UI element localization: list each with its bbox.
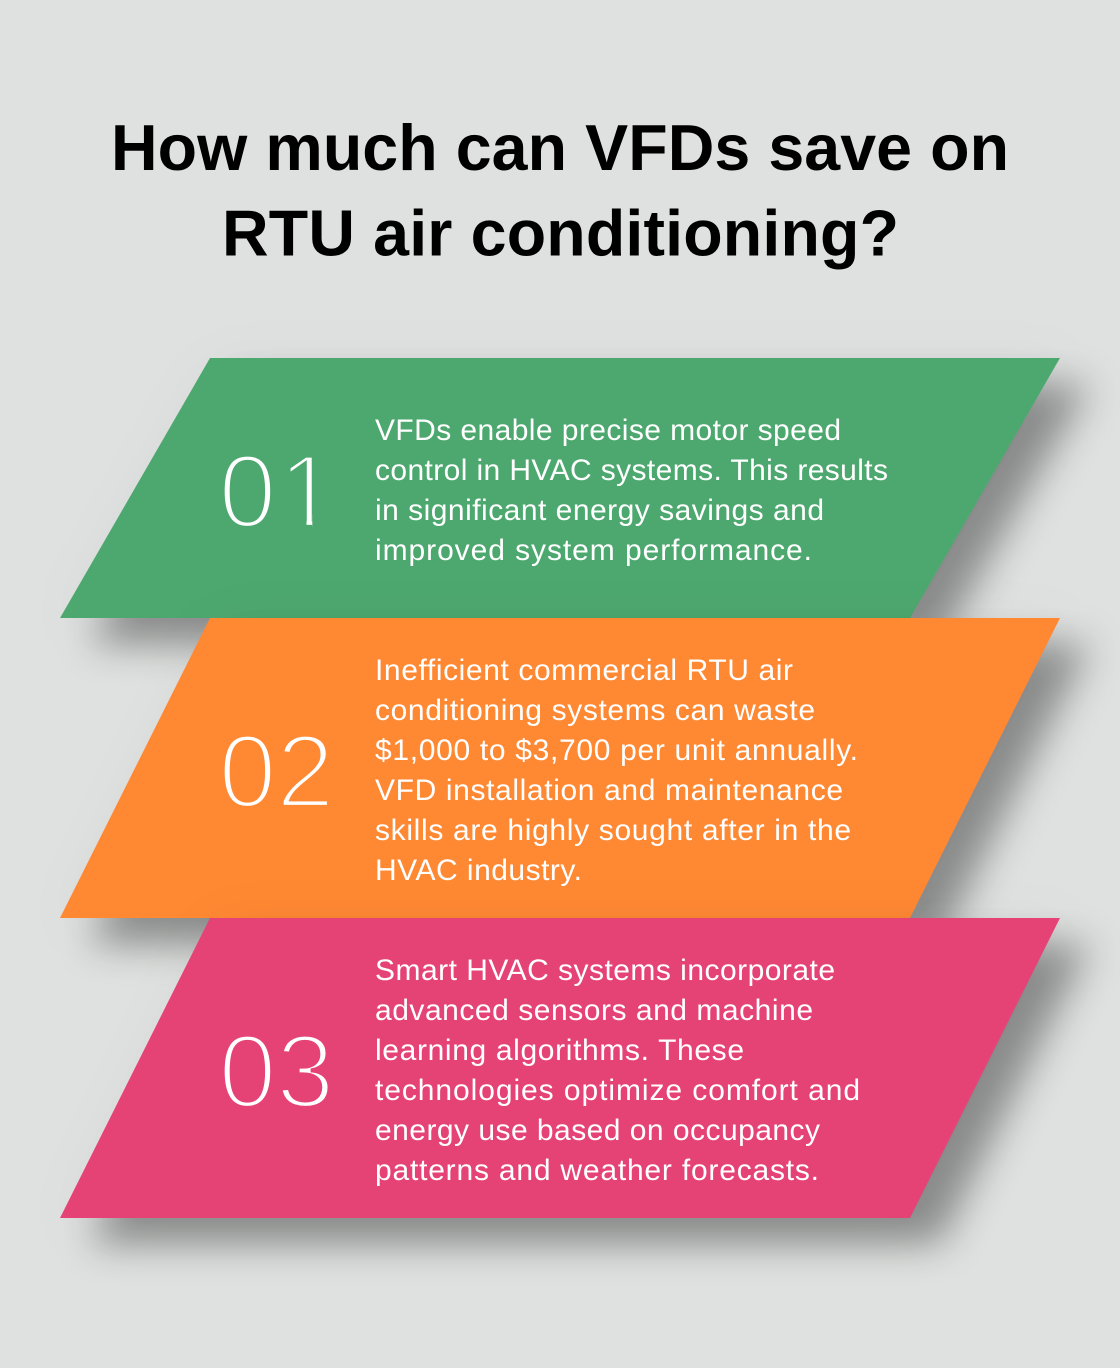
title: RTU air conditioning? (222, 198, 899, 270)
body text 02 (375, 654, 858, 887)
body text 03: energy use based on occupancy (375, 1114, 820, 1147)
body text 03: learning algorithms. These (375, 1034, 744, 1067)
body text 01: improved system performance. (375, 534, 812, 567)
body text 01: in significant energy savings and (375, 494, 824, 527)
title (111, 112, 1009, 270)
body text 03 (375, 954, 860, 1187)
body text 01: VFDs enable precise motor speed (375, 414, 841, 447)
number 03: 03 (218, 1014, 334, 1130)
body text 03: Smart HVAC systems incorporate (375, 954, 835, 987)
body text 03: technologies optimize comfort and (375, 1074, 860, 1107)
body text 02: conditioning systems can waste (375, 694, 815, 727)
body text 02: skills are highly sought after in the (375, 814, 851, 847)
body text 02: VFD installation and maintenance (375, 774, 843, 807)
body text 01 (375, 414, 888, 567)
body text 02: Inefficient commercial RTU air (375, 654, 793, 687)
body text 02: $1,000 to $3,700 per unit annually. (375, 734, 858, 767)
body text 03: patterns and weather forecasts. (375, 1154, 819, 1187)
number 02: 02 (218, 714, 334, 830)
panel: 02 orange (60, 618, 1060, 918)
panel: 01 green (60, 358, 1060, 618)
panel shape: orange parallelogram (60, 618, 1060, 918)
body text 03: advanced sensors and machine (375, 994, 813, 1027)
panel: 03 pink (60, 918, 1060, 1218)
panel shape: green parallelogram (60, 358, 1060, 618)
panel shape: pink parallelogram (60, 918, 1060, 1218)
number 01: 01 (218, 434, 336, 550)
title: How much can VFDs save on (111, 112, 1009, 184)
body text 01: control in HVAC systems. This results (375, 454, 888, 487)
body text 02: HVAC industry. (375, 854, 582, 887)
